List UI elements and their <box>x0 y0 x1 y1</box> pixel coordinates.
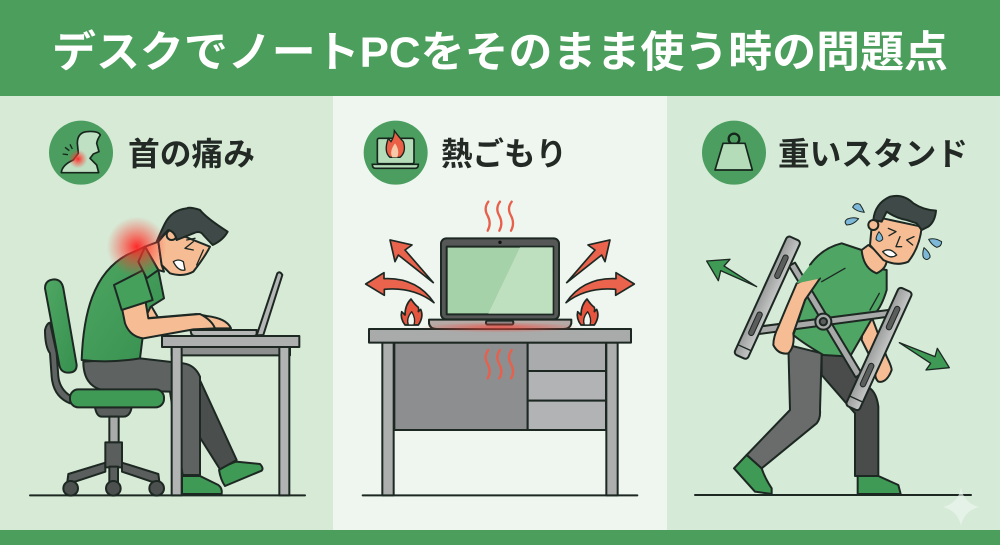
icon: neck pain <box>49 121 113 185</box>
panel: right background <box>667 96 1000 530</box>
icon: weight <box>702 121 766 185</box>
panel: overheating <box>363 121 637 495</box>
icon: sparkle watermark <box>943 488 979 526</box>
title: デスクでノートPCをそのまま使う時の問題点 <box>52 28 948 77</box>
illustration: laptop heating on desk <box>363 202 637 495</box>
heading: overheating: 熱ごもり <box>441 136 567 172</box>
panel: heavy stand <box>695 121 971 495</box>
illustration: man hunched at desk <box>30 208 305 496</box>
footer band <box>0 530 1000 545</box>
heading: heavy stand: 重いスタンド <box>778 136 968 172</box>
icon: laptop with flame <box>364 121 428 185</box>
panel: middle background <box>333 96 667 530</box>
illustration: man carrying heavy stand <box>695 196 971 495</box>
panel: neck pain <box>30 121 305 496</box>
heading: neck pain: 首の痛み <box>128 136 255 172</box>
panel: left background <box>0 96 333 530</box>
header band <box>0 0 1000 96</box>
